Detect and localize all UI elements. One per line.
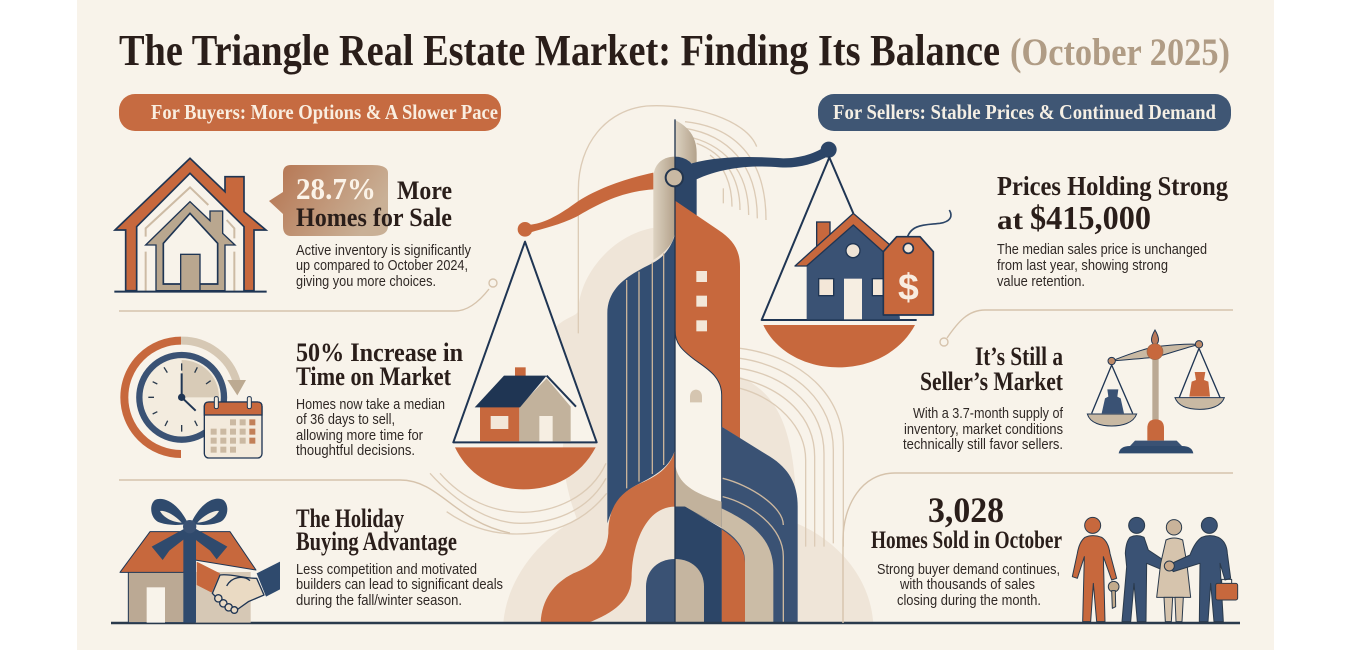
- prices holding strong: [997, 171, 1228, 290]
- homes sold in October: 3,028: [928, 490, 1004, 530]
- right beam: [692, 142, 837, 180]
- stat: 28.7% more homes: Active inventory is significantly: [296, 242, 471, 259]
- holiday advantage: during the fall/winter season.: [296, 592, 462, 609]
- central balance sculpture: [430, 106, 951, 623]
- stat: time on market: Time on Market: [296, 362, 451, 391]
- prices holding strong: Prices Holding Strong: [997, 171, 1228, 201]
- prices holding strong: from last year, showing strong: [997, 257, 1168, 274]
- centre arch door: [646, 559, 704, 623]
- homes sold in October: Homes Sold in October: [871, 527, 1062, 554]
- still a seller's market: inventory, market conditions: [904, 421, 1063, 438]
- stat: time on market: [296, 338, 463, 459]
- holiday advantage: [296, 504, 503, 609]
- navy lower right body: [722, 427, 798, 623]
- divider: left lower: [119, 480, 510, 533]
- stat: 28.7% more homes: Homes for Sale: [296, 203, 452, 232]
- navy centre base: [675, 507, 722, 623]
- banner: for buyers: For Buyers: More Options & A Slower Pace: [151, 100, 498, 124]
- small house: [475, 367, 576, 441]
- holiday advantage: Buying Advantage: [296, 527, 457, 556]
- right pan: seller: [762, 157, 951, 367]
- orange S curve: [541, 450, 675, 623]
- still a seller's market: [903, 342, 1064, 453]
- taupe wedge: [675, 463, 722, 527]
- pan strings: [453, 242, 597, 442]
- taupe top fin: [675, 120, 697, 165]
- seller house: [795, 213, 900, 319]
- navy collar: [675, 157, 697, 217]
- holiday advantage: builders can lead to significant deals: [296, 576, 503, 593]
- callout bubble: [269, 165, 388, 236]
- navy striped column: [607, 235, 675, 523]
- prices holding strong: $415,000: [1030, 200, 1151, 237]
- prices holding strong: at: [997, 205, 1023, 235]
- banner: for sellers: [818, 94, 1231, 131]
- price tag: $: [898, 265, 919, 307]
- title: The Triangle Real Estate Market: Finding Its Balance: [119, 26, 1000, 75]
- divider: left top with node: [119, 279, 497, 311]
- stat: time on market: 50% Increase in: [296, 338, 463, 367]
- prices holding strong: value retention.: [997, 273, 1085, 290]
- homes sold in October: [871, 490, 1062, 609]
- homes sold in October: closing during the month.: [897, 592, 1041, 609]
- homes sold in October: with thousands of sales: [899, 576, 1035, 593]
- banner: for sellers: For Sellers: Stable Prices & Continued Demand: [833, 100, 1216, 124]
- left column icons: [114, 158, 280, 623]
- pivot: [666, 169, 683, 186]
- bowl: [455, 447, 596, 489]
- still a seller's market: Seller’s Market: [920, 367, 1063, 396]
- right column icons: [1072, 330, 1238, 622]
- price tag: [883, 210, 951, 315]
- icon: clock and calendar: [124, 341, 262, 458]
- cream mid body: [675, 330, 722, 527]
- gold arcs on navy: [723, 478, 783, 623]
- stat: time on market: thoughtful decisions.: [296, 442, 415, 459]
- stat: time on market: allowing more time for: [296, 427, 423, 444]
- icon: buyers and sellers group: [1072, 517, 1238, 622]
- stat: time on market: of 36 days to sell,: [296, 411, 395, 428]
- icon: small balance scale: [1087, 330, 1224, 453]
- icon: gift house and handshake: [120, 499, 280, 623]
- divider: right lower: [843, 473, 1233, 623]
- pan strings: [762, 157, 917, 320]
- central spine line: [673, 119, 677, 623]
- title: (October 2025): [1010, 31, 1230, 74]
- icon: house outline: [114, 158, 267, 292]
- orange inner arch: [722, 529, 745, 623]
- stat: 28.7% more homes: up compared to October 2024,: [296, 257, 468, 274]
- stat: time on market: Homes now take a median: [296, 396, 445, 413]
- divider: right top with node: [940, 310, 1233, 346]
- beige background blobs: [503, 227, 873, 623]
- banner: for buyers: [119, 94, 501, 131]
- taupe lower arch: [722, 508, 773, 623]
- left beam: [518, 173, 653, 237]
- decorative arcs: [430, 106, 843, 547]
- left pan: buyer: [453, 242, 597, 489]
- stat: 28.7% more homes: More: [397, 176, 452, 205]
- small arched window: [690, 390, 702, 402]
- baseline: [111, 622, 1240, 624]
- holiday advantage: The Holiday: [296, 504, 404, 533]
- stat: 28.7% more homes: [269, 165, 471, 290]
- still a seller's market: technically still favor sellers.: [903, 436, 1063, 453]
- holiday advantage: Less competition and motivated: [296, 561, 477, 578]
- prices holding strong: The median sales price is unchanged: [997, 241, 1207, 258]
- column stripes: [627, 253, 664, 488]
- taupe column: [653, 157, 675, 260]
- still a seller's market: It’s Still a: [975, 342, 1063, 371]
- bowl: [763, 325, 915, 367]
- stat: 28.7% more homes: 28.7%: [296, 171, 376, 206]
- stat: 28.7% more homes: giving you more choices.: [296, 273, 436, 290]
- orange upper body: [675, 201, 740, 438]
- tower windows: [696, 271, 707, 331]
- homes sold in October: Strong buyer demand continues,: [877, 561, 1060, 578]
- still a seller's market: With a 3.7-month supply of: [913, 405, 1064, 422]
